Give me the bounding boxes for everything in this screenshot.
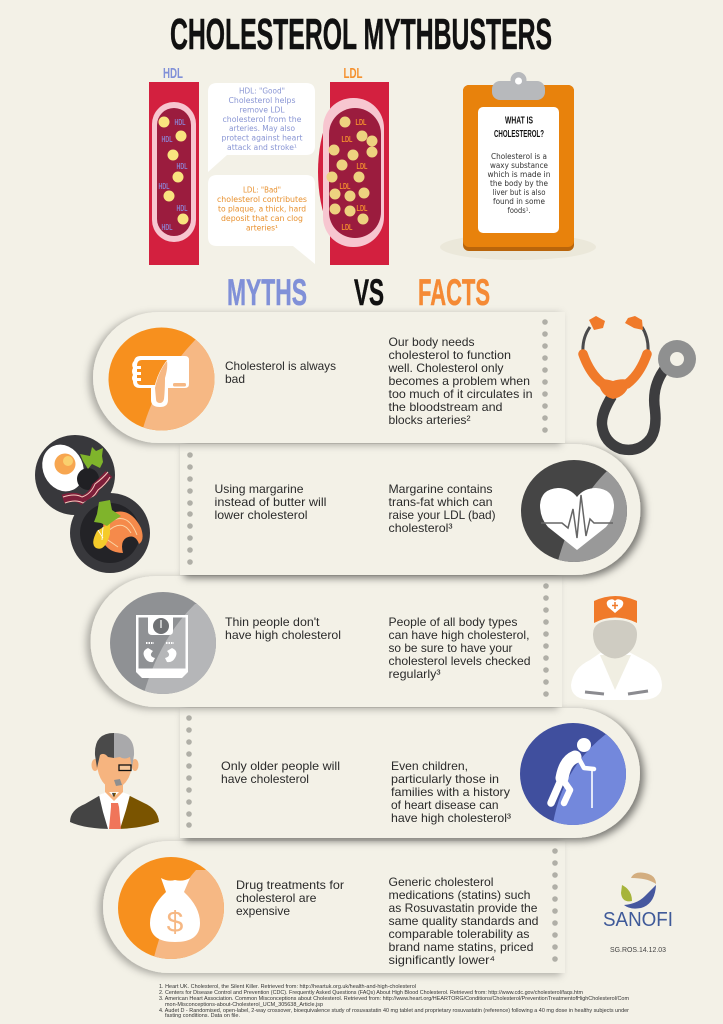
- speech bubble: HDL: remove LDL: [240, 106, 285, 114]
- clipboard: what is cholesterol: waxy substance: [490, 161, 548, 170]
- plate: egg and bacon: [35, 435, 115, 515]
- HDL artery diagram: [149, 65, 199, 265]
- footnotes: 2. Centers for Disease Control and Prevention (CDC). Frequently Asked Questions (FAQs) About High Blood Cholesterol. Retrieved from: http://www.cdc.gov/cholesterol/faqs.htm: [159, 990, 583, 996]
- fact text: Generic cholesterol: [388, 875, 494, 889]
- speech bubble: LDL: to plaque, a thick, hard: [218, 204, 306, 214]
- fact text: same quality standards and: [388, 914, 538, 928]
- fact text: cholesterol³: [388, 521, 452, 535]
- myth text: Thin people don't: [225, 615, 320, 629]
- speech bubble: HDL: attack and stroke¹: [227, 143, 297, 152]
- speech bubble: LDL: deposit that can clog: [221, 214, 303, 223]
- speech bubble: HDL: cholesterol from the: [222, 115, 302, 124]
- icon: money bag: [118, 857, 224, 959]
- footnotes: [159, 984, 629, 1019]
- clipboard: what is cholesterol: liver but is also: [492, 188, 546, 197]
- icon: stethoscope: [583, 316, 696, 450]
- heading: myths vs facts: [227, 272, 490, 313]
- fact text: regularly³: [388, 667, 441, 681]
- myth text: [236, 878, 344, 918]
- icon: food plates: [35, 435, 150, 573]
- HDL artery diagram: HDL: [176, 162, 188, 171]
- myth text: have high cholesterol: [225, 628, 341, 642]
- HDL artery diagram: HDL: [174, 118, 186, 127]
- speech bubble: LDL: LDL: "Bad": [243, 186, 281, 194]
- icon: businessman with glasses: [70, 733, 159, 829]
- clipboard: what is cholesterol: found in some: [493, 197, 545, 206]
- speech bubble: HDL: [208, 83, 315, 172]
- HDL artery diagram: HDL: [162, 223, 173, 232]
- myth text: cholesterol are: [236, 891, 317, 905]
- heading: myths vs facts: FACTS: [418, 272, 490, 313]
- icon: elderly person with cane: [520, 723, 630, 830]
- fact text: brand name statins, priced: [388, 940, 534, 954]
- icon: money bag: $: [167, 906, 184, 939]
- panel: myth 5 drug treatments: [103, 841, 565, 973]
- myth text: [214, 482, 326, 522]
- fact text: medications (statins) such: [388, 888, 530, 902]
- footnotes: 1. Heart UK. Cholesterol, the Silent Killer. Retrieved from: http://heartuk.org.uk/health-and-high-cholesterol: [159, 984, 416, 990]
- logo: Sanofi: SANOFI: [603, 909, 673, 931]
- speech bubble: LDL: cholesterol contributes: [217, 195, 307, 204]
- fact text: so be sure to have your: [388, 641, 512, 655]
- icon: doctor: [571, 596, 662, 700]
- fact text: raise your LDL (bad): [388, 508, 496, 522]
- myth text: [225, 359, 336, 386]
- clipboard: what is cholesterol: which is made in: [488, 170, 551, 179]
- fact text: cholesterol to function: [388, 348, 511, 362]
- icon: heart with pulse: [521, 460, 632, 568]
- fact text: becomes a problem when: [388, 374, 530, 388]
- myth text: bad: [225, 372, 245, 386]
- fact text: [387, 335, 532, 427]
- fact text: Margarine contains: [388, 482, 492, 496]
- myth text: have cholesterol: [221, 772, 309, 786]
- icon: weighing scale: [110, 592, 216, 694]
- HDL artery diagram: HDL: [176, 204, 188, 213]
- plate: salmon and lemon: [70, 493, 150, 573]
- LDL artery diagram: [318, 65, 389, 265]
- footnotes: fasting conditions. Data on file.: [165, 1013, 240, 1019]
- LDL artery diagram: LDL: [342, 223, 353, 232]
- speech bubble: HDL: protect against heart: [222, 134, 303, 142]
- icon: thumbs down: [108, 328, 220, 432]
- myth text: instead of butter will: [214, 495, 326, 509]
- LDL artery diagram: LDL: [344, 65, 362, 82]
- speech bubble: LDL: [208, 175, 315, 264]
- myth text: Using margarine: [214, 482, 304, 496]
- fact text: blocks arteries²: [388, 413, 471, 427]
- fact text: comparable tolerability as: [388, 927, 530, 941]
- fact text: of heart disease can: [391, 798, 498, 812]
- HDL artery diagram: HDL: [158, 182, 170, 191]
- clipboard: what is cholesterol: Cholesterol is a: [491, 152, 547, 161]
- fact text: People of all body types: [388, 615, 518, 629]
- myth text: Cholesterol is always: [225, 359, 336, 373]
- LDL artery diagram: LDL: [340, 182, 351, 191]
- LDL artery diagram: LDL: [356, 204, 368, 213]
- panel: myth 2 margarine: [180, 444, 641, 575]
- clipboard: what is cholesterol: the body by the: [490, 179, 548, 188]
- heading: myths vs facts: VS: [354, 272, 384, 313]
- fact text: significantly lower⁴: [388, 953, 495, 967]
- myth text: [221, 759, 340, 786]
- speech bubble: HDL: HDL: "Good": [239, 86, 285, 96]
- panel: myth 1 cholesterol always bad: [93, 312, 565, 443]
- LDL artery diagram: LDL: [356, 162, 368, 171]
- speech bubble: LDL: arteries¹: [246, 224, 278, 232]
- document code: SG.ROS.14.12.03: [610, 947, 666, 954]
- fact text: [391, 759, 511, 825]
- fact text: as Rosuvastatin provide the: [388, 901, 538, 915]
- panel: myth 3 thin people: [90, 576, 562, 707]
- fact text: Our body needs: [388, 335, 474, 349]
- myth text: Only older people will: [221, 759, 340, 773]
- footnotes: 3. American Heart Association. Common Misconceptions about Cholesterol. Retrieved from: http://www.heart.org/HEARTORG/Conditions/Cholesterol/PreventionTreatmentofHighCholesterol/Com: [159, 996, 629, 1002]
- fact text: particularly those in: [391, 772, 499, 786]
- panel: myth 4 older people: [180, 708, 640, 838]
- clipboard: what is cholesterol: foods¹.: [508, 206, 530, 215]
- fact text: [388, 482, 496, 535]
- myth text: Drug treatments for: [236, 878, 344, 892]
- LDL artery diagram: LDL: [342, 135, 353, 144]
- myth text: expensive: [236, 904, 290, 918]
- fact text: have high cholesterol³: [391, 811, 511, 825]
- footnotes: 4. Audet D - Randomised, open-label, 2-way crossover, bioequivalence study of rosuvastatin 40 mg tablet and proprietary rosuvastatin (reference) following a 40 mg dose in healthy subjects under: [159, 1008, 629, 1014]
- clipboard: what is cholesterol: [440, 72, 596, 260]
- speech bubble: HDL: arteries. May also: [229, 124, 295, 133]
- fact text: Even children,: [391, 759, 468, 773]
- fact text: [388, 875, 538, 967]
- fact text: the bloodstream and: [388, 400, 502, 414]
- logo: Sanofi: [603, 873, 673, 931]
- HDL artery diagram: HDL: [162, 135, 173, 144]
- fact text: cholesterol levels checked: [388, 654, 530, 668]
- myth text: lower cholesterol: [214, 508, 308, 522]
- clipboard: what is cholesterol: WHAT IS: [505, 114, 533, 126]
- fact text: too much of it circulates in: [388, 387, 532, 401]
- speech bubble: HDL: Cholesterol helps: [228, 96, 296, 105]
- myth text: [225, 615, 341, 642]
- fact text: trans-fat which can: [388, 495, 492, 509]
- heading: myths vs facts: MYTHS: [227, 272, 307, 313]
- fact text: [388, 615, 530, 681]
- fact text: can have high cholesterol,: [388, 628, 530, 642]
- LDL artery diagram: LDL: [356, 118, 367, 127]
- fact text: families with a history: [391, 785, 510, 799]
- footnotes: mon-Misconceptions-about-Cholesterol_UCM_305638_Article.jsp: [165, 1002, 323, 1008]
- fact text: well. Cholesterol only: [387, 361, 504, 375]
- clipboard: what is cholesterol: CHOLESTEROL?: [494, 128, 544, 140]
- HDL artery diagram: HDL: [163, 65, 183, 82]
